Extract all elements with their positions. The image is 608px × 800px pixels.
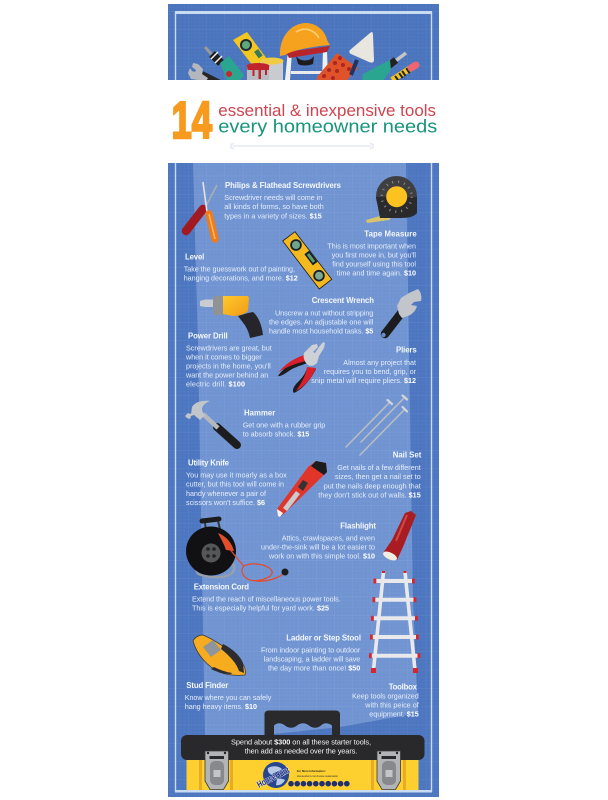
contact info bbox=[297, 769, 338, 778]
text: extension cord: Extension Cord bbox=[194, 582, 249, 591]
text: nail set: sizes, then get a nail set to bbox=[335, 472, 421, 481]
text: utility knife bbox=[186, 459, 287, 507]
text: flashlight: work on with this simple tool. $10 bbox=[268, 552, 375, 561]
icon: utility knife bbox=[277, 461, 327, 517]
icon: pliers bbox=[278, 342, 325, 393]
text: utility knife: scissors won't suffice. $6 bbox=[186, 498, 265, 507]
text: crescent wrench bbox=[269, 296, 374, 335]
toolbox body bbox=[186, 755, 418, 790]
text: nail set: Get nails of a few different bbox=[337, 463, 421, 472]
text: power drill: Power Drill bbox=[188, 331, 228, 340]
icon: red lego bricks bbox=[317, 53, 358, 80]
text: nail set: they don't stick out of walls. $15 bbox=[318, 490, 421, 499]
text: crescent wrench: Crescent Wrench bbox=[312, 296, 374, 305]
icon: extension cord reel bbox=[186, 519, 288, 581]
text: crescent wrench: the edges. An adjustable one will bbox=[269, 317, 374, 326]
text: stud finder: Stud Finder bbox=[186, 681, 228, 690]
text: power drill: when it comes to bigger bbox=[185, 352, 262, 361]
icon: orange cord and plug bbox=[226, 544, 288, 581]
text: screwdrivers: Screwdriver needs will come in bbox=[224, 193, 322, 202]
text: tape measure bbox=[327, 230, 417, 278]
toolbox lid bbox=[181, 735, 424, 760]
icon: trowel bbox=[349, 32, 374, 75]
text: power drill: electric drill. $100 bbox=[186, 380, 245, 389]
text: nail set: Nail Set bbox=[393, 451, 422, 460]
text: nail set bbox=[318, 451, 422, 499]
icon: teal drill right bbox=[362, 53, 406, 82]
text: hammer: to absorb shock. $15 bbox=[243, 430, 309, 439]
icon: ladder bbox=[369, 571, 420, 673]
text: crescent wrench: Unscrew a nut without stripping bbox=[275, 308, 373, 317]
icon: spirit level bbox=[233, 32, 267, 66]
title bbox=[172, 92, 437, 150]
title line 2: every homeowner needs bbox=[218, 116, 437, 137]
text: crescent wrench: handle most household tasks. $5 bbox=[269, 326, 373, 335]
icon: hard hat bbox=[280, 23, 330, 80]
icon: header tools group bbox=[188, 23, 416, 84]
text: tape measure: find yourself using this tool bbox=[332, 260, 416, 269]
text: tape measure: Tape Measure bbox=[364, 230, 417, 239]
text: tape measure: This is most important when bbox=[327, 241, 416, 250]
text: toolbox: Toolbox bbox=[389, 682, 418, 691]
right latch bbox=[377, 751, 400, 790]
text: tape measure: you first move in, but you'll bbox=[332, 250, 416, 259]
HouseHunt logo: HouseHunt bbox=[255, 765, 292, 791]
icon: level bbox=[283, 232, 332, 289]
text: ladder bbox=[261, 633, 361, 672]
text: toolbox: equipment. $15 bbox=[369, 710, 419, 719]
text: toolbox bbox=[352, 682, 419, 719]
text: power drill bbox=[185, 331, 272, 389]
text: ladder: landscaping, a ladder will save bbox=[264, 654, 360, 663]
text: stud finder: hang heavy items. $10 bbox=[185, 702, 257, 711]
text: extension cord: Extend the reach of miscellaneous power tools. bbox=[192, 595, 341, 604]
contact info: For More Information: bbox=[297, 769, 326, 773]
icon: wrench bbox=[188, 63, 220, 80]
text: pliers: Pliers bbox=[396, 346, 417, 355]
icon: pencil bbox=[392, 65, 416, 80]
panel: header blueprint bbox=[168, 4, 439, 84]
text: hammer: Hammer bbox=[244, 409, 275, 418]
text: toolbox: Keep tools organized bbox=[352, 692, 419, 701]
icon: power drill bbox=[200, 296, 263, 338]
text: flashlight: under-the-sink will be a lot easier to bbox=[261, 542, 375, 551]
text: pliers: snip metal will require pliers. $12 bbox=[311, 376, 416, 385]
text: pliers: requires you to bend, grip, or bbox=[324, 367, 417, 376]
title line 1: essential & inexpensive tools bbox=[218, 102, 436, 120]
text: nail set: put the nails deep enough that bbox=[324, 481, 421, 490]
text: flashlight: Flashlight bbox=[340, 521, 376, 530]
text: screwdrivers: all kinds of forms, so have both bbox=[224, 202, 324, 211]
icon: teal drill left bbox=[205, 47, 244, 83]
icon: flashlight bbox=[382, 511, 416, 562]
text: hammer bbox=[243, 409, 325, 439]
social icons bbox=[288, 781, 350, 786]
HouseHunt logo bbox=[255, 762, 292, 791]
closing message bbox=[231, 737, 371, 755]
text: power drill: want the power behind an bbox=[185, 371, 268, 380]
title number 14: 14 bbox=[172, 92, 212, 150]
icon: nails bbox=[346, 396, 407, 455]
text: pliers: Almost any project that bbox=[343, 358, 416, 367]
text: utility knife: handy whenever a pair of bbox=[186, 489, 266, 498]
contact info: HouseHunt.com/news-realestate/ bbox=[297, 774, 338, 778]
text: extension cord bbox=[192, 582, 341, 613]
text: utility knife: cutter, but this tool will come in bbox=[186, 480, 284, 489]
text: flashlight bbox=[261, 521, 376, 561]
text: power drill: projects in the home, you'll bbox=[186, 362, 271, 371]
text: level bbox=[184, 252, 298, 282]
text: hammer: Get one with a rubber grip bbox=[243, 421, 325, 430]
toolbox bbox=[181, 710, 424, 791]
text: ladder: Ladder or Step Stool bbox=[286, 633, 361, 642]
text: ladder: From indoor painting to outdoor bbox=[261, 645, 361, 654]
icon: tape measure bbox=[366, 176, 417, 223]
left latch bbox=[205, 751, 228, 790]
text: extension cord: This is especially helpful for yard work. $25 bbox=[192, 604, 329, 613]
icon: paint cans bbox=[246, 58, 284, 80]
text: power drill: Screwdrivers are great, but bbox=[186, 343, 272, 352]
text: tape measure: time and time again. $10 bbox=[337, 269, 416, 278]
text: level: Take the guesswork out of painting, bbox=[184, 264, 295, 273]
wrench divider bbox=[231, 144, 373, 148]
text: stud finder bbox=[185, 681, 272, 711]
text: stud finder: Know where you can safely bbox=[185, 693, 272, 702]
text: level: hanging decorations, and more. $12 bbox=[184, 273, 298, 282]
text: flashlight: Attics, crawlspaces, and even bbox=[282, 533, 375, 542]
closing message: then add as needed over the years. bbox=[245, 746, 357, 755]
text: screwdrivers bbox=[224, 181, 342, 220]
icon: hammer bbox=[185, 401, 237, 445]
text: utility knife: You may use it moarly as a box bbox=[186, 471, 287, 480]
icon: crescent wrench bbox=[381, 289, 421, 337]
closing message: Spend about $300 on all these starter tools, bbox=[231, 737, 371, 746]
text: screwdrivers: Philips & Flathead Screwdrivers bbox=[225, 181, 342, 190]
text: toolbox: with this peice of bbox=[364, 701, 419, 710]
toolbox handle bbox=[264, 710, 340, 736]
text: pliers bbox=[311, 346, 417, 385]
icon: stud finder bbox=[193, 635, 245, 675]
text: screwdrivers: types in a variety of sizes. $15 bbox=[224, 211, 322, 220]
text: level: Level bbox=[185, 252, 204, 261]
text: ladder: the day more than once! $50 bbox=[268, 663, 360, 672]
panel: tools blueprint bbox=[168, 163, 439, 797]
text: utility knife: Utility Knife bbox=[188, 459, 230, 468]
icon: screwdrivers bbox=[186, 182, 217, 239]
